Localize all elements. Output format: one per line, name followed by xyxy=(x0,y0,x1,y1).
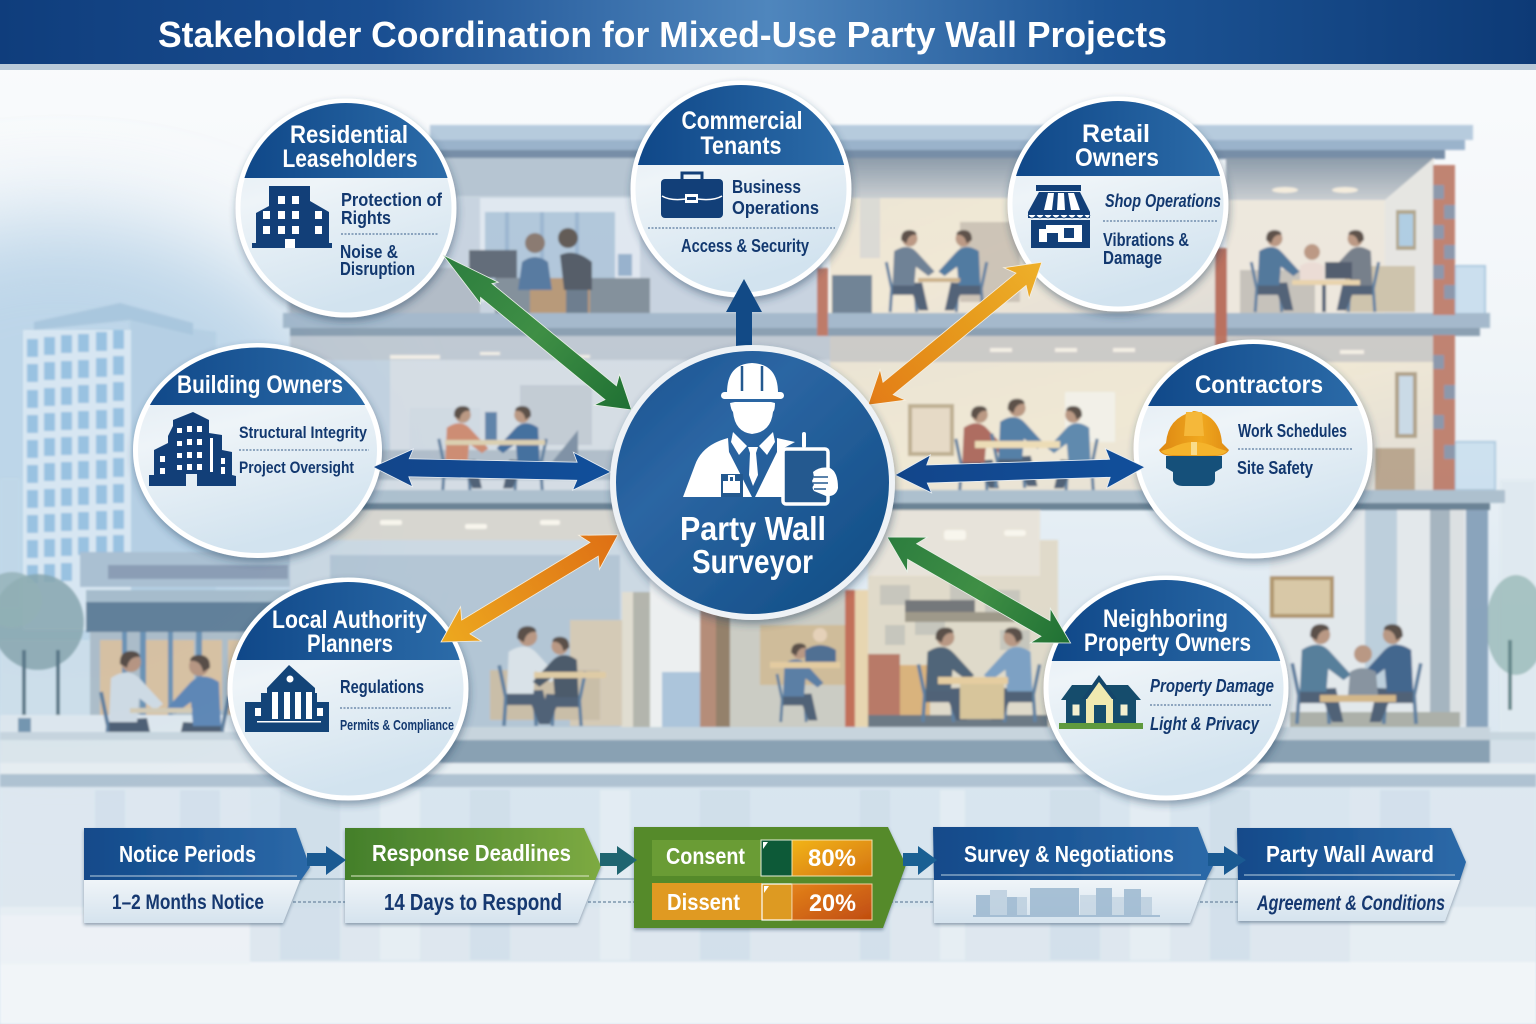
process connector lines xyxy=(84,879,1240,902)
text: noise and disruption: Noise & xyxy=(340,242,398,262)
text: business operations: Operations xyxy=(732,198,819,218)
top floor people xyxy=(886,230,1379,312)
hub label: Party Wall xyxy=(680,510,826,547)
text: permits and compliance: Permits & Compliance xyxy=(340,717,454,734)
panel: Party Wall Surveyor hub xyxy=(613,348,892,617)
heading: Owners xyxy=(1075,144,1159,172)
icon: office block xyxy=(149,412,236,486)
row: Dissent 20%: Dissent xyxy=(667,889,740,915)
heading: Property Owners xyxy=(1084,629,1251,657)
ground slab and pavement xyxy=(0,727,1536,787)
panel: Local Authority Planners xyxy=(230,580,466,798)
text: light and privacy: Light & Privacy xyxy=(1150,714,1260,734)
street level shop and tree xyxy=(0,552,300,758)
panel: Neighboring Property Owners xyxy=(1046,578,1286,798)
step: consent and dissent split xyxy=(634,827,906,928)
icon: house xyxy=(1059,675,1143,729)
city tower on the left xyxy=(0,303,216,630)
step: Survey and Negotiations: Survey & Negotiations xyxy=(964,841,1174,867)
text: site safety: Site Safety xyxy=(1237,458,1313,478)
icon: apartment building xyxy=(252,186,332,248)
middle floor rooms xyxy=(290,336,1495,492)
title: Stakeholder Coordination for Mixed-Use Party Wall Projects xyxy=(158,14,1167,55)
panel: Building Owners xyxy=(136,346,380,556)
panel: Residential Leaseholders xyxy=(238,101,454,315)
heading: Commercial xyxy=(682,107,802,135)
icon: civic building xyxy=(245,665,329,732)
right tree xyxy=(1486,480,1536,740)
arrow: step 4 to step 5 xyxy=(1208,846,1246,875)
step: Survey and Negotiations xyxy=(933,827,1213,923)
heading xyxy=(1084,605,1251,657)
floor slab 2 xyxy=(290,490,1505,510)
arrow: step 3 to step 4 xyxy=(903,846,937,875)
text: vibrations and damage: Damage xyxy=(1103,248,1162,268)
row: Dissent 20%: 20% xyxy=(809,890,856,917)
row: Consent 80%: Consent xyxy=(666,843,745,869)
panel: Contractors xyxy=(1136,342,1370,556)
text: structural integrity: Structural Integrity xyxy=(239,423,367,442)
text: property damage: Property Damage xyxy=(1150,676,1274,696)
arrow: Building Owners and surveyor xyxy=(373,448,611,491)
text: business operations: Business xyxy=(732,177,801,197)
heading xyxy=(682,107,802,160)
heading: Planners xyxy=(307,630,393,658)
text: work schedules: Work Schedules xyxy=(1238,421,1347,441)
step: Party Wall Award xyxy=(1237,828,1466,921)
heading: Residential xyxy=(290,121,408,149)
heading: Local Authority xyxy=(272,606,427,634)
text: access and security: Access & Security xyxy=(681,236,809,256)
text: project oversight: Project Oversight xyxy=(239,458,354,477)
text: business operations xyxy=(732,177,819,218)
middle floor people xyxy=(439,399,1097,490)
arrow: step 1 to step 2 xyxy=(307,846,346,875)
heading: Contractors xyxy=(1195,371,1323,399)
lower floor people xyxy=(101,624,1421,760)
floor slab 1 xyxy=(283,313,1490,336)
hub label xyxy=(680,510,826,580)
row: Consent 80%: 80% xyxy=(808,845,856,872)
text: regulations: Regulations xyxy=(340,677,424,697)
arrow: Retail Owners and surveyor xyxy=(855,247,1055,420)
heading xyxy=(272,606,427,658)
arrow: Residential Leaseholders and surveyor xyxy=(430,240,644,425)
brick columns xyxy=(817,165,1455,492)
icon: briefcase xyxy=(661,173,723,218)
text: protection of rights: Rights xyxy=(341,208,391,228)
text: noise and disruption: Disruption xyxy=(340,259,415,279)
arrow: step 2 to step 3 xyxy=(600,846,637,875)
step: Response Deadlines xyxy=(345,828,601,923)
heading: Neighboring xyxy=(1103,605,1228,633)
icon: faint building skyline xyxy=(973,888,1160,917)
text: vibrations and damage: Vibrations & xyxy=(1103,230,1189,250)
arrow: Commercial Tenants to surveyor xyxy=(726,279,762,347)
text: vibrations and damage xyxy=(1103,230,1189,268)
top floor rooms xyxy=(287,158,1485,318)
step: Response Deadlines: 14 Days to Respond xyxy=(384,889,562,915)
step: Notice Periods xyxy=(84,828,310,923)
hub label: Surveyor xyxy=(692,543,813,580)
heading xyxy=(1075,120,1159,172)
text: protection of rights: Protection of xyxy=(341,190,443,210)
text: protection of rights xyxy=(341,190,443,228)
heading: Retail xyxy=(1082,120,1150,148)
row: Dissent 20% xyxy=(652,883,872,920)
heading xyxy=(282,121,418,173)
arrow: Neighboring Property Owners and surveyor xyxy=(877,520,1081,660)
arrow: Contractors and surveyor xyxy=(894,447,1146,495)
lower floor rooms xyxy=(290,510,1488,730)
text: shop operations: Shop Operations xyxy=(1105,191,1221,211)
heading: Tenants xyxy=(700,132,782,160)
water reflection under the building xyxy=(0,787,1536,1024)
icon: shop front xyxy=(1028,185,1090,248)
heading: Building Owners xyxy=(177,371,343,399)
step: Notice Periods: 1–2 Months Notice xyxy=(112,891,264,914)
heading: Leaseholders xyxy=(282,145,418,173)
step: Party Wall Award: Party Wall Award xyxy=(1266,841,1434,867)
title banner xyxy=(0,0,1536,70)
text: noise and disruption xyxy=(340,242,415,279)
icon: hard hat xyxy=(1159,411,1229,486)
icon: surveyor with hard hat and clipboard xyxy=(683,363,838,504)
panel: Commercial Tenants xyxy=(633,83,849,295)
step: Notice Periods: Notice Periods xyxy=(119,841,256,867)
step: Party Wall Award: Agreement & Conditions xyxy=(1256,892,1445,915)
row: Consent 80% xyxy=(652,840,872,876)
arrow: Local Authority Planners and surveyor xyxy=(431,518,628,659)
panel: Retail Owners xyxy=(1010,99,1226,309)
roof slab xyxy=(430,125,1473,159)
step: Response Deadlines: Response Deadlines xyxy=(372,840,571,866)
